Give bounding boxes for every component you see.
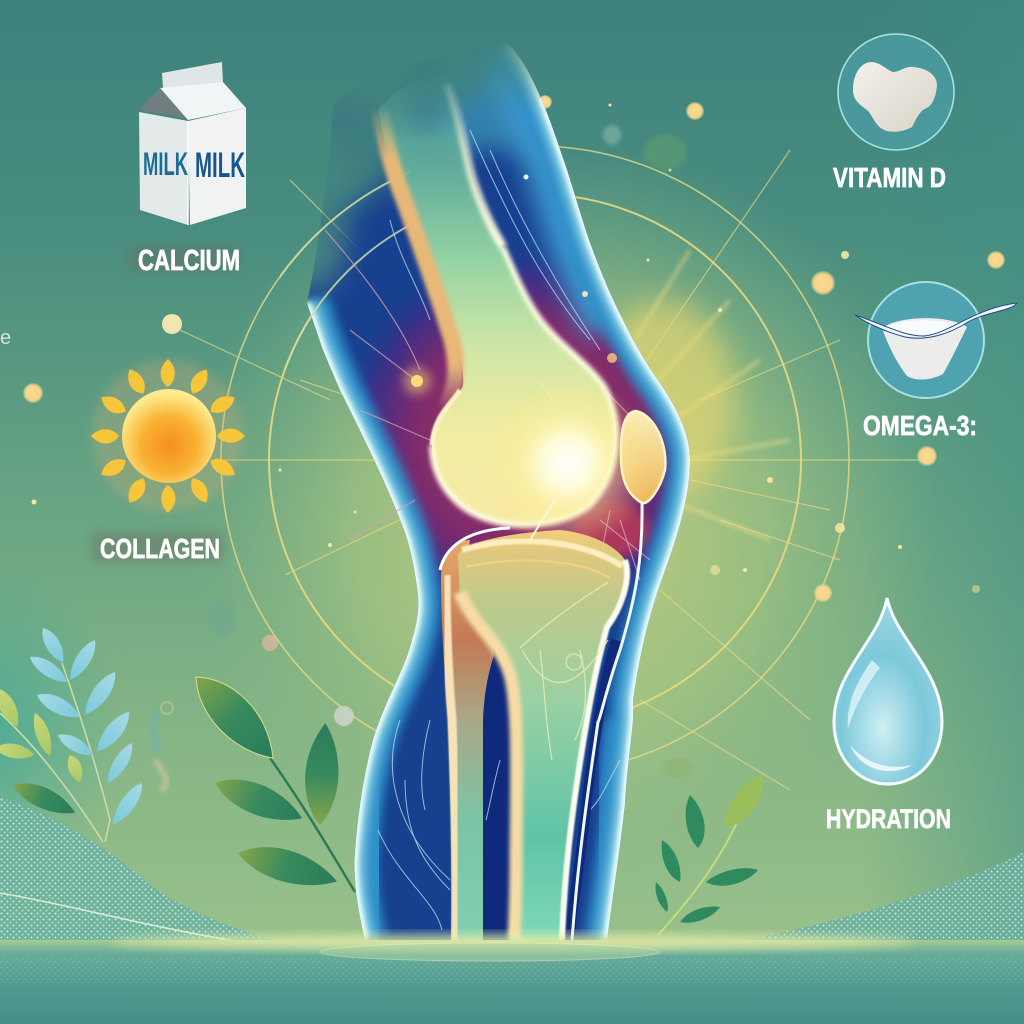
outer joint lines bbox=[440, 528, 510, 570]
water drop icon bbox=[834, 598, 942, 784]
label: omega-3: OMEGA-3: bbox=[863, 410, 977, 441]
radial burst lines and rings bbox=[180, 146, 920, 790]
vitamin d icon bbox=[838, 34, 954, 150]
knee illustration bbox=[280, 43, 690, 940]
tibia bbox=[458, 530, 627, 940]
fibula bbox=[441, 540, 494, 940]
right green leaves bbox=[655, 758, 763, 935]
sun icon bbox=[91, 359, 245, 513]
milk carton bbox=[139, 62, 246, 225]
faint plant motif near top bbox=[603, 125, 687, 170]
femur bbox=[378, 76, 616, 525]
label: hydration: HYDRATION bbox=[826, 804, 951, 834]
central green leaves bbox=[182, 663, 355, 896]
left dotted hill bbox=[0, 797, 290, 945]
bone texture lines bbox=[462, 380, 608, 760]
milk label right: MILK bbox=[195, 146, 245, 185]
label: collagen: COLLAGEN bbox=[100, 533, 220, 564]
milk label left: MILK bbox=[143, 146, 188, 182]
right dotted hill bbox=[735, 852, 1024, 945]
warm glow behind the knee bbox=[595, 300, 735, 500]
inner glow spots bbox=[403, 174, 617, 395]
stray letter left edge: e bbox=[0, 327, 11, 349]
label: calcium: CALCIUM bbox=[138, 245, 240, 277]
left blue plant bbox=[0, 624, 148, 842]
connector nodes bbox=[23, 95, 1005, 726]
central flare bbox=[483, 378, 653, 548]
sparkle particles bbox=[32, 104, 980, 593]
ground band bbox=[0, 934, 1024, 1024]
omega-3 bowl icon bbox=[855, 282, 1017, 398]
leg silhouette bbox=[307, 43, 690, 940]
patella bbox=[621, 411, 665, 503]
nerve lines bbox=[378, 130, 620, 930]
navy gap right of tibia bbox=[569, 640, 616, 940]
label: vitamin d: VITAMIN D bbox=[833, 162, 946, 193]
rings over upper-left leg bbox=[280, 171, 410, 370]
faint sprigs bbox=[153, 598, 236, 790]
